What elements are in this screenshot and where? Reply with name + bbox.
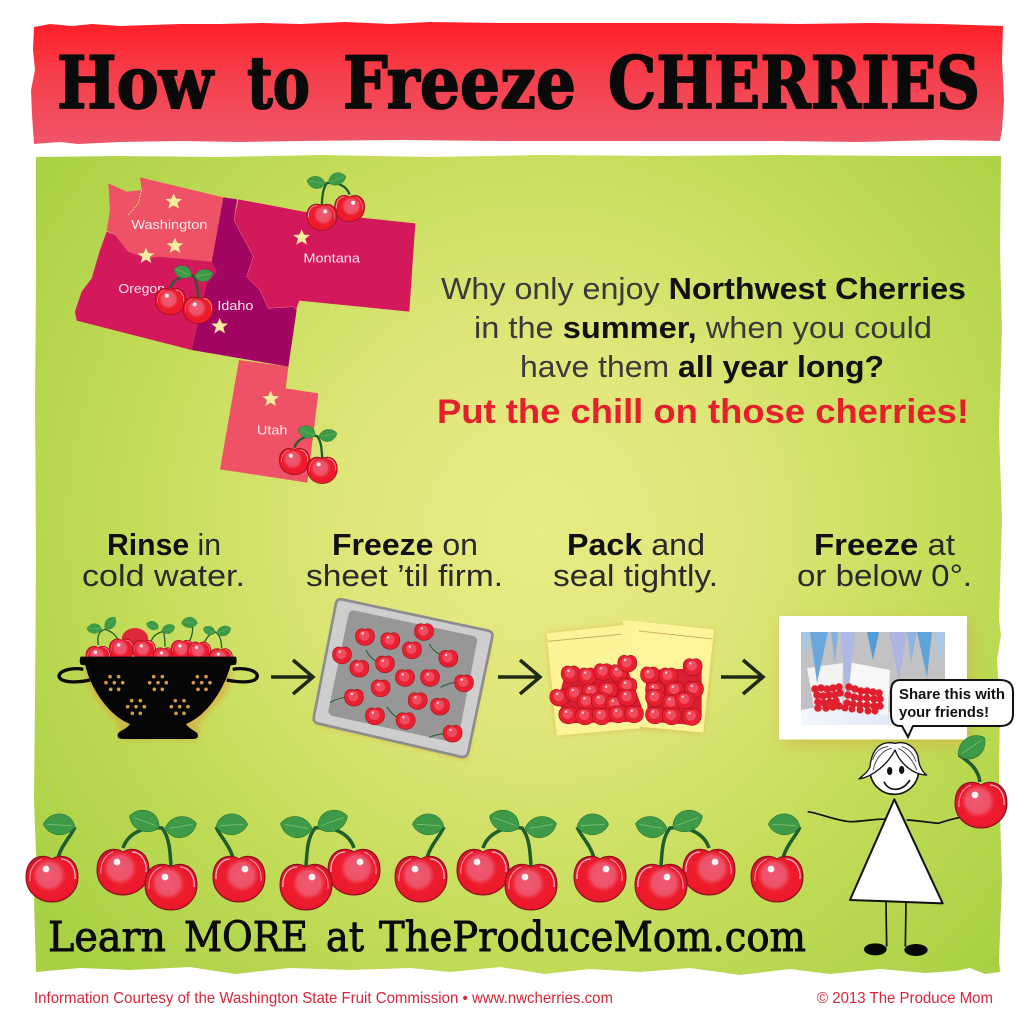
step 2 label: Freeze on: [332, 527, 478, 562]
arms: [808, 812, 962, 823]
Washington: Washington: [131, 217, 207, 232]
speech bubble: your friends!: [899, 705, 989, 721]
cherry 1: [26, 809, 78, 902]
dress: [850, 799, 943, 903]
photo: bags in freezer: [779, 616, 970, 744]
Idaho: Idaho: [217, 298, 253, 313]
intro text: in the summer, when you could: [474, 310, 932, 345]
step 3 label: seal tightly.: [553, 558, 718, 593]
Montana: Montana: [303, 250, 361, 265]
cherry 7: [574, 809, 626, 902]
cherry in hand: [954, 732, 1007, 828]
cherry 5: [395, 809, 447, 902]
callout: Put the chill on those cherries!: [437, 393, 969, 431]
icon: sealed freezer bags: [547, 620, 714, 736]
title: to: [247, 40, 310, 125]
icon: colander with cherries: [59, 615, 257, 740]
arrow 1: [271, 660, 313, 694]
credit: Information Courtesy of the Washington State Fruit Commission • www.nwcherries.com: [34, 990, 613, 1007]
intro text: [437, 271, 969, 431]
intro text: Why only enjoy Northwest Cherries: [441, 271, 966, 306]
step 3 label: [553, 527, 718, 593]
row of cherries: [26, 803, 803, 910]
icon: cherries on Utah: [279, 422, 337, 484]
step 1 label: cold water.: [82, 558, 245, 593]
step 4 label: Freeze at: [814, 527, 955, 562]
cherries 8: [635, 803, 735, 910]
speech bubble: [891, 680, 1013, 737]
icon: cherries on Montana: [307, 169, 365, 231]
step 4 label: [797, 527, 972, 593]
icon: cherries on Oregon: [155, 262, 213, 324]
header banner: [31, 22, 1004, 144]
step 2 label: [306, 527, 503, 593]
step 2 label: sheet ’til firm.: [306, 558, 503, 593]
Washington: [107, 177, 223, 262]
icicles: [801, 632, 945, 707]
Montana: [234, 199, 415, 312]
head: [870, 746, 919, 794]
website call to action: at: [326, 913, 364, 961]
face: [887, 767, 892, 775]
icon: baking sheet with cherries: [313, 599, 493, 760]
title: [57, 40, 980, 125]
title: How: [57, 40, 215, 125]
copyright: © 2013 The Produce Mom: [817, 990, 993, 1007]
Utah: [220, 360, 318, 483]
step 1 label: Rinse in: [107, 527, 221, 562]
Oregon: Oregon: [118, 281, 165, 296]
hair: [859, 743, 927, 779]
step 3 label: Pack and: [567, 527, 705, 562]
legs and feet: [886, 902, 906, 947]
intro text: have them all year long?: [520, 349, 884, 384]
cherries 4: [280, 803, 380, 910]
stick figure mom: [808, 743, 962, 956]
step 4 label: or below 0°.: [797, 558, 972, 593]
map: northwest states: [75, 177, 415, 483]
speech bubble: Share this with: [899, 687, 1005, 703]
Oregon: [75, 232, 217, 350]
title: Freeze: [343, 40, 576, 125]
Idaho: [192, 197, 297, 367]
Utah: Utah: [257, 422, 287, 437]
cherry 9: [751, 809, 803, 902]
arrow 3: [721, 660, 763, 694]
website call to action: Learn: [48, 913, 166, 961]
cherry 3: [213, 809, 265, 902]
website call to action: [48, 913, 806, 961]
website call to action: TheProduceMom.com: [379, 913, 806, 961]
arrow 2: [498, 660, 540, 694]
cherries 2: [97, 803, 197, 910]
cherries 6: [457, 803, 557, 910]
green main panel: [34, 155, 1002, 975]
step 1 label: [82, 527, 245, 593]
website call to action: MORE: [184, 913, 308, 961]
